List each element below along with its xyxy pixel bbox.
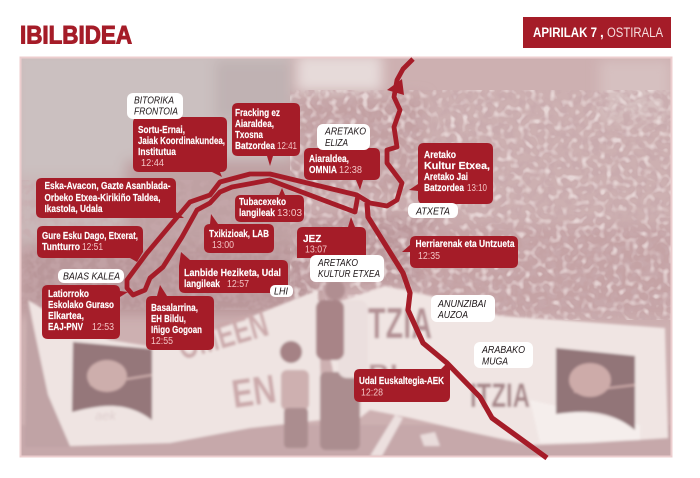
banner lettering — [179, 306, 530, 408]
callout: Herriarenak eta Untzueta: Herriarenak eta Untzueta — [416, 239, 515, 250]
photo frame — [20, 58, 672, 456]
callout: Basalarrina, EH Bildu: Iñigo Gogoan — [151, 325, 202, 336]
callout: Txikizioak, LAB: Txikizioak, LAB — [209, 229, 269, 240]
callout: Gure Esku Dago — [37, 226, 143, 262]
left banner cloth — [28, 290, 322, 446]
callout: Udal Euskaltegia-AEK — [354, 363, 450, 402]
callout: Eska-Avacon — [36, 178, 184, 218]
callout: Udal Euskaltegia-AEK: Udal Euskaltegia-AEK — [359, 376, 445, 387]
banner lettering: EN — [229, 367, 279, 417]
date box: , — [600, 25, 604, 40]
callout: Lanbide Heziketa: langileak — [184, 279, 220, 290]
callout: Fracking ez: Batzordea — [235, 141, 275, 152]
callout: Latiorroko Eskolako Guraso Elkartea: Eskolako Guraso — [48, 300, 114, 311]
label: Bitorika Frontoia — [127, 93, 183, 119]
callout: Aretako Kultur Etxea: Aretako — [424, 150, 456, 161]
callout: Fracking ez: Fracking ez — [235, 108, 280, 119]
callout: JEZ: 13:07 — [305, 244, 327, 256]
callout: Lanbide Heziketa: 12:57 — [227, 279, 249, 290]
banner lettering: ITZIA — [360, 299, 432, 348]
callout: Aiaraldea, OMNIA — [304, 148, 380, 190]
callout: Latiorroko Eskolako Guraso Elkartea: 12:53 — [92, 322, 114, 333]
label: Aretako Eliza — [317, 124, 370, 150]
callout: Basalarrina, EH Bildu: EH Bildu, — [151, 314, 186, 325]
banner lettering: OMEEN — [173, 303, 273, 368]
callout: Latiorroko Eskolako Guraso Elkartea: EAJ-PNV — [48, 322, 83, 333]
left logo flag — [72, 342, 152, 420]
callout: Basalarrina, EH Bildu — [146, 285, 214, 350]
callout: Aiaraldea, OMNIA: OMNIA — [309, 165, 337, 176]
callout: Lanbide Heziketa: Lanbide Heziketa, Udal — [184, 268, 281, 279]
callout: Txikizioak, LAB — [204, 214, 274, 253]
callout: Latiorroko Eskolako Guraso Elkartea: Latiorroko — [48, 289, 89, 300]
callout: Aretako Kultur Etxea: 13:10 — [467, 183, 487, 194]
callout: Basalarrina, EH Bildu: Basalarrina, — [151, 303, 198, 314]
callout: Fracking ez: 12:41 — [277, 141, 297, 152]
marcher figure — [320, 372, 360, 450]
callout: Txikizioak, LAB: 13:00 — [212, 240, 234, 251]
callout: Tubacexeko langileak: 13:03 — [277, 208, 302, 219]
callout: Tubacexeko langileak — [235, 188, 304, 222]
callout: Herriarenak eta Untzueta — [402, 236, 518, 268]
label: Arabako Muga: MUGA — [482, 356, 508, 368]
label: Anunzibai Auzoa: ANUNZIBAI — [437, 299, 486, 310]
callout: Latiorroko Eskolako Guraso Elkartea — [42, 285, 128, 339]
label: Aretako Kultur Etxea: ARETAKO — [317, 258, 358, 269]
banner lettering: ITZIA — [470, 377, 530, 415]
callout: Gure Esku Dago: 12:51 — [82, 242, 103, 253]
callout: Fracking ez: Txosna — [235, 130, 263, 141]
label: Aretako Eliza: ARETAKO — [324, 126, 366, 138]
callout: Latiorroko Eskolako Guraso Elkartea: Elkartea, — [48, 311, 84, 322]
route line — [127, 59, 547, 458]
callout: Tubacexeko langileak: langileak — [239, 208, 275, 219]
banner lettering: BI — [368, 359, 398, 392]
callout: Aretako Kultur Etxea: Kultur Etxea, — [424, 161, 490, 172]
label: Anunzibai Auzoa: AUZOA — [437, 310, 468, 321]
label: Arabako Muga — [474, 342, 533, 368]
callout: Sortu-Ernai: Sortu-Ernai, — [138, 125, 185, 136]
callout: Eska-Avacon: Orbeko Etxea-Kirikiño Taldea, — [44, 193, 161, 204]
label: LHI: LHI — [274, 286, 288, 298]
right banner cloth — [320, 286, 668, 445]
callout: Lanbide Heziketa — [179, 252, 288, 293]
label: Arabako Muga: ARABAKO — [481, 345, 525, 356]
callout: Eska-Avacon: Ikastola, Udala — [44, 204, 103, 215]
label: Atxeta: ATXETA — [415, 206, 450, 218]
callout: Sortu-Ernai: 12:44 — [141, 158, 164, 169]
callout: Fracking ez — [232, 103, 300, 166]
callout: Aretako Kultur Etxea — [409, 143, 493, 204]
label: Bitorika Frontoia: FRONTOIA — [134, 106, 178, 118]
child figure — [281, 370, 309, 410]
background photo: demonstration crowd with banners: aek — [95, 408, 117, 423]
lower street band — [282, 444, 362, 452]
callout: Udal Euskaltegia-AEK: 12:28 — [361, 388, 383, 398]
callout: Aiaraldea, OMNIA: Aiaraldea, — [309, 154, 349, 165]
callout: Eska-Avacon: Eska-Avacon, Gazte Asanblada- — [44, 181, 170, 192]
label: Atxeta — [408, 203, 458, 218]
date box: APIRILAK 7 — [533, 25, 597, 40]
date box: OSTIRALA — [607, 25, 663, 40]
label: Aretako Eliza: ELIZA — [325, 138, 348, 149]
callout: Aretako Kultur Etxea: Aretako Jai — [424, 172, 468, 183]
label: Baias Kalea: BAIAS KALEA — [63, 272, 120, 282]
callout: Gure Esku Dago: Gure Esku Dago, Etxerat, — [42, 231, 138, 242]
date box — [523, 17, 671, 48]
callout: Basalarrina, EH Bildu: 12:55 — [151, 336, 173, 347]
callout: Gure Esku Dago: Tuntturro — [42, 242, 80, 253]
callout: Herriarenak eta Untzueta: 12:35 — [418, 251, 440, 262]
title: IBILBIDEA — [20, 22, 132, 50]
label: Aretako Kultur Etxea — [310, 255, 384, 282]
callout: JEZ: JEZ — [303, 234, 321, 245]
label: Baias Kalea — [58, 269, 124, 283]
callout: Sortu-Ernai: Institutua — [138, 147, 176, 158]
label: Anunzibai Auzoa — [431, 295, 495, 322]
label: Bitorika Frontoia: BITORIKA — [134, 96, 174, 106]
callout: Sortu-Ernai: Jaiak Koordinakundea, — [138, 136, 225, 147]
route direction arrow — [387, 79, 404, 95]
label: LHI — [270, 285, 293, 298]
callout: Fracking ez: Aiaraldea, — [235, 119, 274, 130]
callout: JEZ — [297, 217, 366, 258]
callout: Aretako Kultur Etxea: Batzordea — [424, 183, 464, 194]
callout: Sortu-Ernai — [133, 117, 227, 177]
callout: Aiaraldea, OMNIA: 12:38 — [339, 165, 362, 176]
label: Aretako Kultur Etxea: KULTUR ETXEA — [318, 269, 380, 280]
callout: Tubacexeko langileak: Tubacexeko — [239, 197, 286, 208]
right logo flag — [556, 348, 635, 430]
